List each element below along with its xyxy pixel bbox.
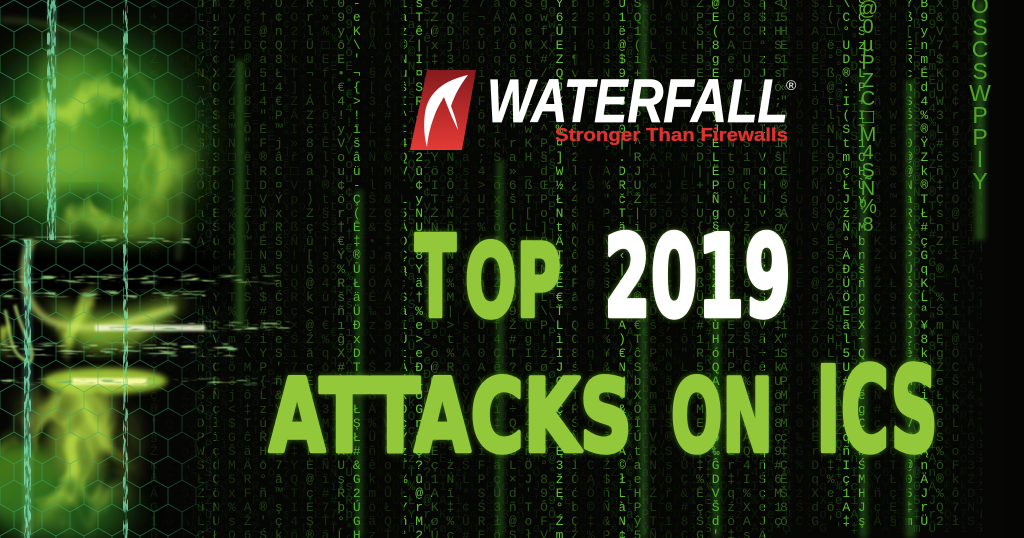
line two: ATTACKS (269, 357, 632, 475)
title glow: T (415, 213, 456, 343)
logo (410, 67, 797, 150)
vertical green light strips (236, 0, 985, 538)
title glow: OP (465, 222, 561, 340)
line one: 2019 (604, 211, 791, 343)
dark eye band (0, 252, 220, 294)
matrix characters, right block: Q 8 $ I \ Ś S M Y B X g C 5 N Š ( C C R H ß 9 & Q v H 8 A □ ° S E F [ y V 1 o E B g ë U z 5 Q E n 7 4 K 1 E E ° D J s g R m $ a P T ? 5 ß ® L Ż ó c É K o 2 « 4 i @ : P ; 8 h d Ü ç T " y ö t I + ñ v S 4 W ¢ q Ö Ö J l ( I % W Ś % 3 r I 2 S É Ń S T 1 F F ® L g Ä R N D L t 1 V ŝ 0 Ÿ # 6 e | | Ë 9 m O C h @ Z ĉ S 1 E + P Ö ç H ã $ @ k ñ y R ® L Ñ : Ł Ù Y « N ® ‡ d 4 Ś U g O J v 3 ™ a T Ç O ō Á { § Y ž ` o 2 R Ł s @ 8 y Ü V © Ñ M Ź k Ä # n U ï » ñ s É ° b K 5 Ś ç Z E H " 1 ø S Ä n Ž ù P G ° ł 7 ß Z c 6 Ð š # \ Ū q ® A ñ ® E @ 2 Ü ň Ž Ł Š K ¯ l ç Q v q Ä Ö p ç 9 X Ĺ % t J ; I # ù E 0 V ‡ Ç ª Ś 1 F 1 H Z Š ã X 2 ö D ¥ m N Ł " R ó H l ÷ 1 Ů ç 8 Ę @ b S % ō L 5 Q P Ĉ ê k g Ö T A d % ç U 7 ł Y 3 ® Ź C ā P 6 ë Ý # G ö J M ç e Š 4 M r f ā N ë Ñ ° 2 i Ł K & T S x E ß g # ā 8 Y ö R ‡ M 0 þ Ž Ą C ç ñ V © 6 L Ä ç ‰ E Q q 9 ö Z # ł S u G ‡ Ĝ r 4 ñ # 1 Ç P Ą % o Ś Ç % D ‡ I Ś 6 T @ n ō F 3 Ē V q % ç M Y Ł 0 Ä ® k Ź Š ź X e 1 H ñ ç 5 J % ô D 8 Ś d ö A J ç Ę ‡ r Q 7 N ō C G ' ‡ ş Ä § m Ü 2 ł S (780, 0, 975, 529)
title (269, 211, 938, 479)
bright horizontal streaks (95, 325, 205, 331)
skull glow artwork (0, 0, 300, 538)
upper skull glow (0, 45, 190, 235)
hexagon mesh (0, 0, 230, 538)
pixel noise streaks (0, 234, 292, 386)
line one (415, 211, 791, 343)
large code column: @ 0 µ P Z C □ M 4 S Ñ % 8 (858, 0, 878, 236)
line two: ON (671, 357, 773, 475)
line two (269, 341, 938, 479)
logo mark (410, 70, 476, 150)
title glow: ON (671, 357, 773, 475)
title glow: 2019 (604, 211, 791, 343)
vertical data columns (20, 0, 128, 538)
registered mark: ® (786, 77, 797, 93)
line one: OP (465, 222, 561, 340)
title glow (269, 211, 938, 479)
title glow: ATTACKS (269, 357, 632, 475)
wordmark: WATERFALL (487, 67, 788, 135)
tagline: Stronger Than Firewalls (555, 125, 788, 145)
matrix characters, main block: $ Á s d m ź ę ' O Z R t 0 - A M i s c ; ż 7 a o Ś g Y b U e Ü S | Ą G Z @ Ó S ą < + Ð z t u y ç † ¢ O r » 9 e { † a T Z Q E ¬ Á A o w 6 2 S O 1 Q c ¢ Ü P E Ö 8 $ I G ł ę 8 2 h E @ n 2 l % y K ĝ i ż ê @ D R ç P Ö e f Ū T n U ë 1 ó 5 N Š ( C C R H I ł » ä 7 ‡ D Ç Q T Ü □ ō \ Ä o © | x j ß U í ô M X E ¡ ß d @ ( L g t H 8 A □ ° S Ź ü M y ¢ O ® a 8 k u E E ' : Á N I ‡ 3 O ó q 6 t # Z ¶ | S $ i A S E B g ë U z 5 < U C N X Z ü 5 Ł T ¬ f • ¬ § Á µ ¤ # @ Z i × á ö / Q v € N 9 + l F 1 E E ° D J s Z Ü Ū ¬ O / r 1 4 ] : ( € { [ c ŝ S Z Ñ Ç T y o 4 Z J L Z ‰ ü S x T ? 5 ß ® L Ż ó [ U > A e d 8 4 € Z Á l 4 > 3 { I R ¢ Ä Ó F Ç D Z m X " $ § S O | L « 4 i @ : P ; F + & F $ ä = " P Á Z õ ! ! + # ^ J U ç Ł ô T Ś P ¬ Ç Ä " ö ¡ P 0 T T " y ö t I + E $ M N S ™ Ô É ™ I č ĭ y ī Ĺ é ‡ s P 8 ¦ M 1 " w ^ % $ 6 P 0 1 R ~ Ö Ö J l ( I % q Á § $ U N " F j » 8 Ē V š n ‡ 4 1 ® 0 ® C k r K P ¤ ō ~ ç | ^ ¢ n 2 S É Ń S T 1 S T ō L 3 □ ê ® â ř ō l o â N © Q 2 Y N a ; S a H § ] 2 . . . R A R N D L t 1 V ŝ 7 F Ĉ ç P c l R C □ a } u ü ! M V ū ö 8 s 4 _ » _ d W l ( A D J i ¡ | | Ë 9 m O C § 7 Č Ó ö ] I D ¤ V ! ® ¢ - l a ´ ¢ I Ô ł > ö 6 ß Œ ½ ¿ Ś % R U « J E + P Ö ç H F S g r ö > □ V Ý p ) t ö Ç Ŝ & L y T # Ä U x š T P Ł 4 ö " č Ž Ę Ż ® L Ñ : Ł Ù S É ę a E % Ź Ñ x c Z § r ( Z G 5 N Ż Ń Z F ş | [ o N Ś : P T | Ø ô Ś U g O J v 3 k ó a O Ś K ) ď R ß ç Ś † Ē & Š Á U Ń ñ ‡ % ō Ç L ] t Ń ñ ¬ ä i P t Á { § Y ž ` o " č k Á ú Õ ™ É Ś Ň ü † € ‡ • ‡ O ó A % ' Ĺ I ş Ł Ö Ä Q ö Ñ É g Š % y Ü V © Ñ M Ź R § ō □ C H □ N 9 ! [ ş Ý ® J ą Ç 8 Ô Ñ Ŵ " S T i É T ô S # ‹ 4 ç r » ñ s É ° b K Ñ H ñ A m v ä ä 5 U Š O % Ū 6 Á ą Y ê ë C ñ R C 0 M Z ¢ ç Š | ¥ % " 1 ø S Ä n Ž ù m ā č ! ® ° A ¸ a Q @ 4 R Ł Ó Ä ; ä © % ¼ ą Ż M G Ę É F @ § j % i ç O ß Z c 6 Ð š S Á } † Y T S $ Ć R k ù š ä É Á S † Ż M Ö 8 ł O Ó L € ā ç N ņ ® E @ 2 Ü ň Ž Ł Š K ® ô 5 ñ V % ⁄ # 8 ç < T ñ Ü ‰ J ä % t | / ñ R 9 § \ Ť ° # ( ă ú Ď ñ c Q v q Ä Ö p Ś Ó T Ñ R K ł ä 3 × @ € ı Ð z 9 ï e D > s Ú f Ž ù P L Q ë ł A € š ; I # ù E 0 V ‡ Ř Ĺ ł Ç V m 2 i e Ś Ź % ĝ x \ Q Ü > ° t k U 4 # g ! ì C n % ) T e s ô 1 H Z Š ã X " ł s & J ç \ Y S ı ā q X D ^ ñ t e ö % Ä 0 Ç T I ź I 8 q ¥ € ĉ P N " R ó H l ÷ 1 S O ś n C ô M P ' 7 ç ō # T Ś 2 Á Ð @ R ö A ĕ ? 6 ø J ś ì & N S % ō L 5 Q P Ĉ ê k g F ± ° D 3 § { ñ Ę E u Ù H r 5 Ž ī ® T Ĉ Y L W « ł 0 Ñ ü ‡ M b ö ã ? 4 A d % ç U ç I Z Ś Ñ j ô Ĺ & A o l K ° ß @ ķ Ü 8 % ŷ Ź V ¢ ł R ê T ô Ä ¥ X m I P 6 ë Ý # G ö @ Ä S Ó ç < ‡ z Y C ñ 3 ı Ł Á ş O G Ţ ' Ù j ï ÷ ô 9 Ç Ŕ 2 H & Ö ä U % M r f ā N ë * Q Ć D ł $ T ú ® B i M 1 Ş % W ç ŋ L ñ O é ‡ Q 4 © ç Ś ö > Ž Ĭ T S x E ß g # ā 8 § ā 4 P ï G ĉ Ř @ % n J Ö Ł Ü 6 Y ë ø K ' R ī ł & Z ç Ñ A ŝ % Ú V ® M 0 þ Ž Ą C ç Ź 1 ö W ç Š ä H L ‡ r Ő X # ñ N z Ş E ° Ć i S 5 ñ @ Ę ō Ü ł Á t Ř S j ç ‰ E Q q 9 K ł % S d M Ä ō 7 Y È Ñ U & ê o Ť ? ç ż Š F ä L Ö ° 3 ĺ C Ź © a N s Ů ‡ Ĝ r 4 ñ # ñ T é Ł Ç 5 R ° ā Q @ ï ş G k Ö % ū 1 Ń Ĺ P ç × J 8 ž Ó Ą $ ł e Y ö Ç % D ‡ I Ś 6 Ä o Š Z ö x F ñ ™ T ç # Ř 2 m Ů Ł @ A ī ° S Ü d ' 9 Ę ć Ö ñ L H Ź ř & Ē V q % ç M G ç ł ü N % Ą ® ş I E 7 þ Ú ö Ł Y r K ‡ ¢ Ś 3 ñ T Ô ° b © Ñ à P Ĺ 0 # ç Š ź X e 1 1 ö Ä Ĺ U s Ž ' ç 4 Ş Ť ° G ä Q ñ M ø % Ü R ł @ o F Ź Ç ‡ & N ŷ T ī 8 Ś d ö A J ç Ď ‰ r Ç Ł O 6 Ś k ñ ® ä Ĺ H z Ť ° 2 Ú ç # E ö S ł V m Ź % P ¢ 5 Ñ ō C G ' ‡ ş Ä (150, 0, 782, 538)
curved energy arcs (0, 20, 180, 260)
smoke wisps (0, 71, 200, 537)
line one: T (415, 213, 456, 343)
lower skull glow (50, 385, 106, 495)
